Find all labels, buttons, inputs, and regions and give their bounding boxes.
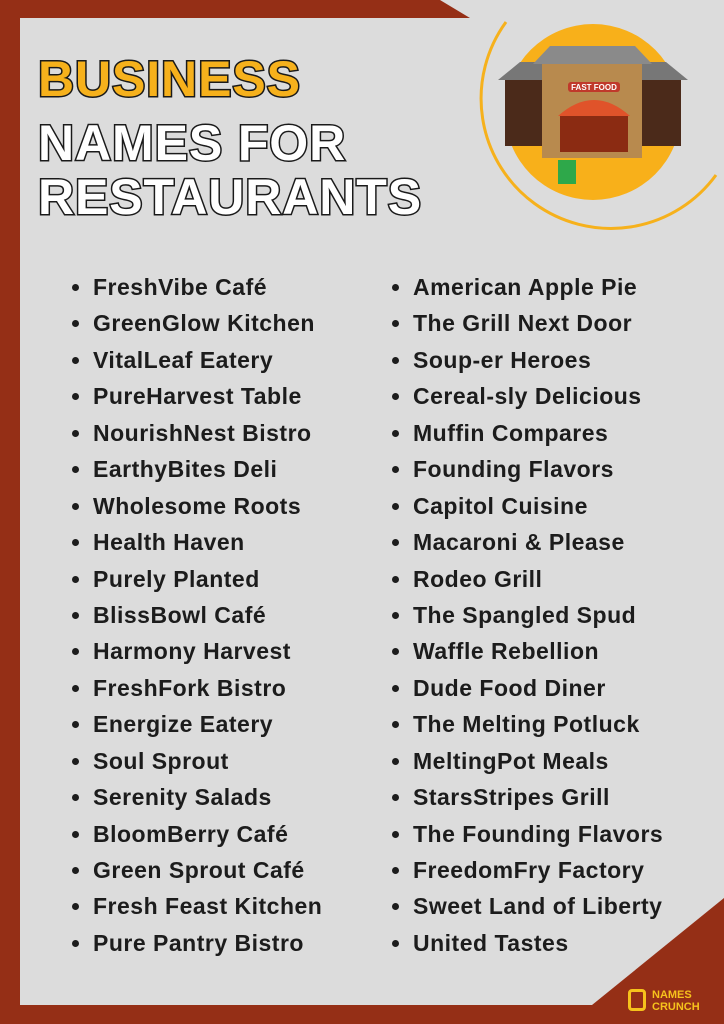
list: right column: Founding Flavors xyxy=(413,456,614,482)
list: left column: Harmony Harvest xyxy=(93,638,291,664)
logo: CRUNCH xyxy=(652,1001,700,1013)
list: right column: StarsStripes Grill xyxy=(413,784,610,810)
list: left column: EarthyBites Deli xyxy=(93,456,277,482)
list: left column: Fresh Feast Kitchen xyxy=(93,893,322,919)
icon: restaurant illustration xyxy=(480,21,718,230)
list: right column: MeltingPot Meals xyxy=(413,748,609,774)
list: right column: Soup-er Heroes xyxy=(413,347,591,373)
list: left column: BlissBowl Café xyxy=(93,602,266,628)
list: left column: Green Sprout Café xyxy=(93,857,305,883)
list: left column: NourishNest Bistro xyxy=(93,420,312,446)
list: left column: Energize Eatery xyxy=(93,711,273,737)
list: left column: FreshVibe Café xyxy=(93,274,267,300)
list: left column: Purely Planted xyxy=(93,566,260,592)
logo xyxy=(628,989,700,1013)
list: left column: GreenGlow Kitchen xyxy=(93,310,315,336)
logo: NAMES xyxy=(652,989,692,1001)
list: right column: The Grill Next Door xyxy=(413,310,632,336)
list: right column: American Apple Pie xyxy=(413,274,637,300)
list: left column: Wholesome Roots xyxy=(93,493,301,519)
title: RESTAURANTS xyxy=(38,169,422,225)
title: NAMES FOR xyxy=(38,115,346,171)
list: right column: United Tastes xyxy=(413,930,569,956)
list: left column: BloomBerry Café xyxy=(93,821,288,847)
list: right column: Rodeo Grill xyxy=(413,566,542,592)
list: left column: Soul Sprout xyxy=(93,748,229,774)
list: right column: Sweet Land of Liberty xyxy=(413,893,662,919)
list: right column: Waffle Rebellion xyxy=(413,638,599,664)
list: left column: PureHarvest Table xyxy=(93,383,302,409)
list: right column: The Melting Potluck xyxy=(413,711,640,737)
list: left column: Serenity Salads xyxy=(93,784,272,810)
list: left column: Health Haven xyxy=(93,529,245,555)
list: right column: Capitol Cuisine xyxy=(413,493,588,519)
list: right column: The Spangled Spud xyxy=(413,602,636,628)
icon: restaurant illustration: FAST FOOD xyxy=(571,83,617,92)
list: left column: Pure Pantry Bistro xyxy=(93,930,304,956)
list: right column: The Founding Flavors xyxy=(413,821,663,847)
list: right column: FreedomFry Factory xyxy=(413,857,644,883)
list: right column: Muffin Compares xyxy=(413,420,608,446)
list: right column: Dude Food Diner xyxy=(413,675,606,701)
title: BUSINESS xyxy=(38,51,301,107)
title xyxy=(38,51,422,225)
list: right column xyxy=(392,274,663,956)
list: right column: Macaroni & Please xyxy=(413,529,625,555)
list: right column: Cereal-sly Delicious xyxy=(413,383,642,409)
list: left column xyxy=(72,274,322,956)
list: left column: FreshFork Bistro xyxy=(93,675,286,701)
list: left column: VitalLeaf Eatery xyxy=(93,347,273,373)
